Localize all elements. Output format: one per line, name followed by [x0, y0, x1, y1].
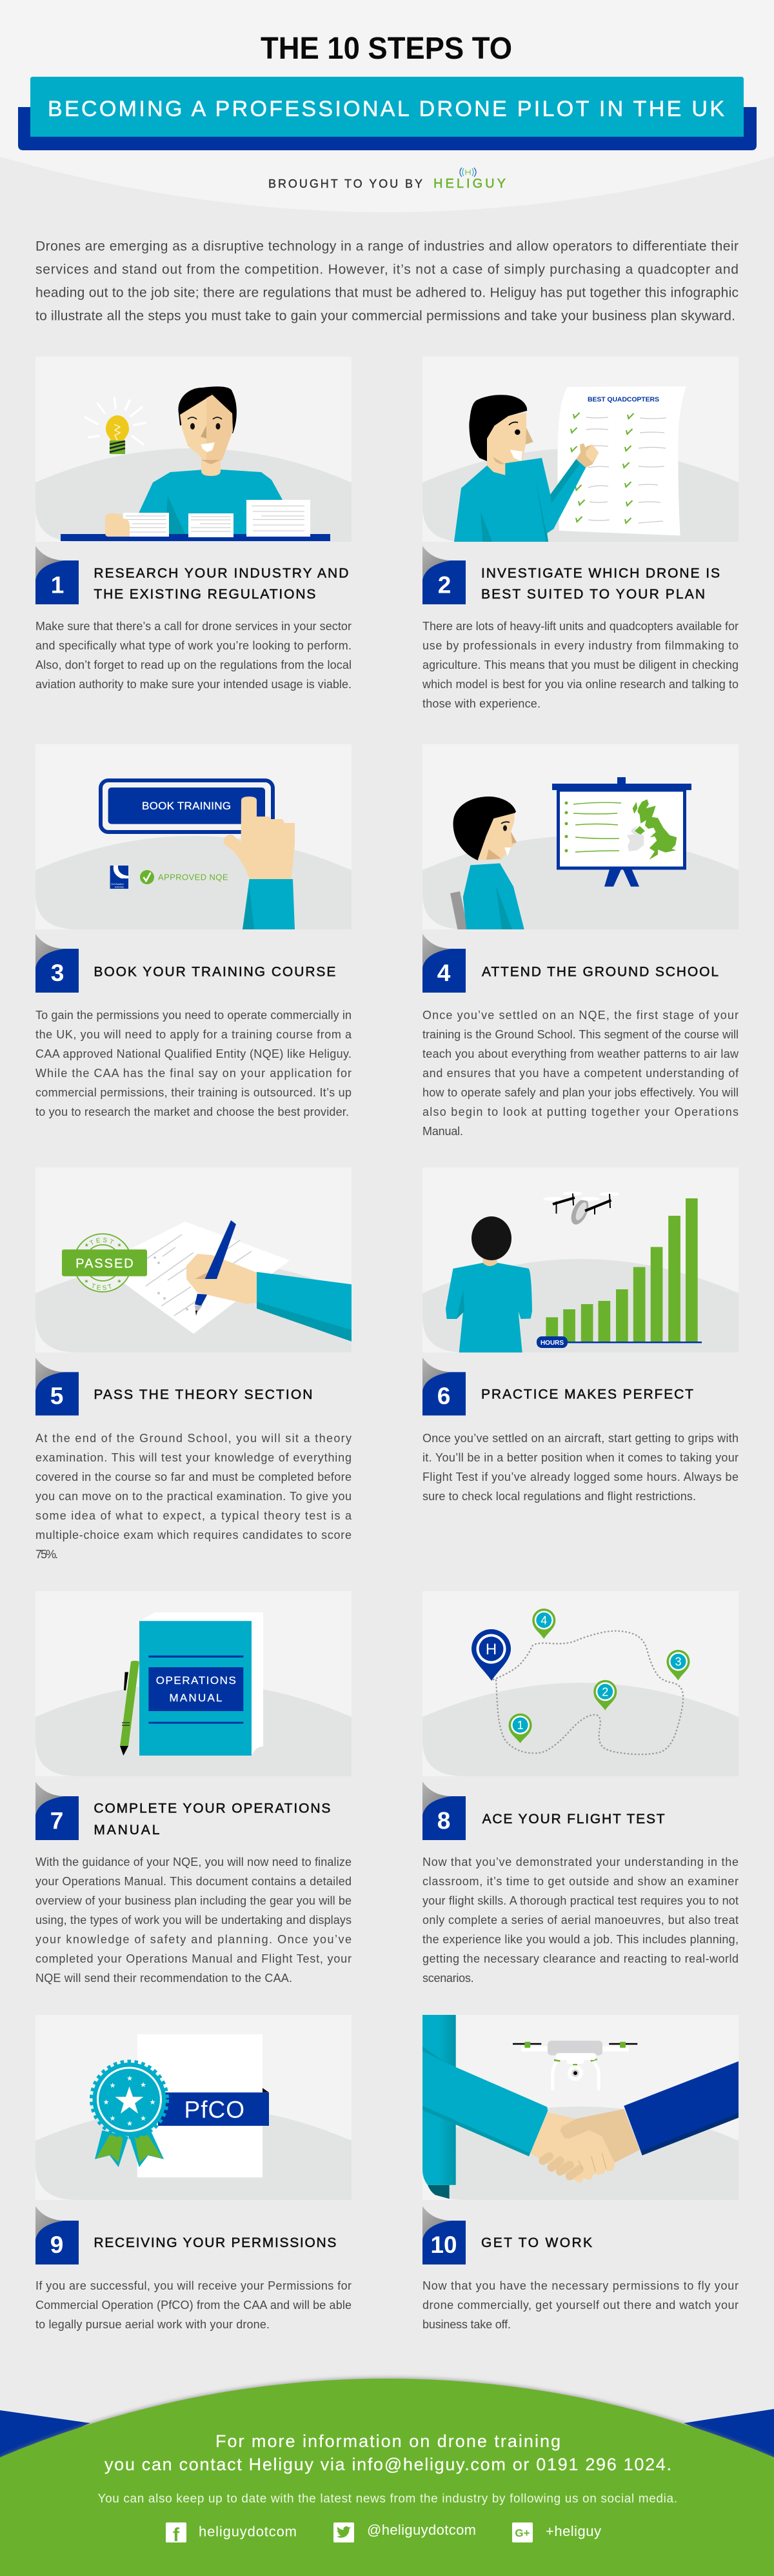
panel: step 5 theory: [35, 1220, 352, 1561]
step 5 body text: At the end of the Ground School, you will sit a theory: [35, 1432, 352, 1445]
step 7 body text: overview of your business plan including the gear you will be: [35, 1894, 352, 1907]
rosette: ★: [140, 2115, 146, 2123]
footer blue ribbons: [0, 2409, 774, 2461]
panel: step 3 book training: [35, 744, 352, 1118]
step 5 body text: multiple-choice exam which requires candidates to score: [35, 1529, 352, 1541]
step 3 heading: BOOK YOUR TRAINING COURSE: [94, 965, 335, 979]
rosette: ★: [110, 2082, 116, 2090]
passed stamp: ★: [84, 1278, 89, 1284]
step 4 heading: ATTEND THE GROUND SCHOOL: [482, 965, 719, 979]
step 4 body text: teach you about everything from weather patterns to air law: [422, 1047, 739, 1060]
chair: [450, 891, 468, 929]
step 1 badge: [35, 546, 79, 604]
passed stamp: ★: [117, 1242, 122, 1248]
dotted route: [493, 1631, 683, 1754]
step 1 body text: and specifically what type of work you’re looking to perform.: [35, 639, 352, 652]
step 6 body text: sure to check local regulations and flight restrictions.: [422, 1490, 696, 1503]
step 5 body text: you can move on to the practical examination. To give you: [35, 1490, 352, 1503]
social: google plus: +heliguy: [546, 2523, 601, 2539]
person: [454, 395, 599, 542]
step 1 body text: [35, 620, 352, 691]
pin: helipad: H: [486, 1641, 497, 1658]
panel: step 4 ground school: [422, 744, 739, 1138]
step 3 body text: To gain the permissions you need to operate commercially in: [35, 1009, 352, 1022]
title banner: BECOMING A PROFESSIONAL DRONE PILOT IN THE UK: [48, 97, 724, 121]
step 6 badge: 6: [437, 1383, 450, 1409]
illustration: handshake with drone: [422, 2015, 739, 2200]
rosette: ★: [140, 2081, 146, 2089]
pin 3: 3: [675, 1655, 682, 1668]
panel: step 9 permissions: [35, 2015, 352, 2331]
pin 4: [532, 1609, 555, 1639]
step 5 badge: 5: [50, 1383, 63, 1409]
book: OPERATIONS: [156, 1674, 236, 1687]
pen: [120, 1661, 139, 1756]
checklist: BEST QUADCOPTERS: [588, 396, 659, 404]
rosette: ★: [126, 2120, 133, 2128]
step 8 body text: scenarios.: [422, 1972, 474, 1985]
passed stamp: PASSED: [75, 1257, 134, 1271]
step 1 badge: 1: [51, 571, 64, 599]
pin 1: [509, 1714, 532, 1743]
step 8 body text: getting the necessary clearance and reacting to real-world: [422, 1952, 739, 1965]
step 9 body text: Commercial Operation (PfCO) from the CAA and will be able: [35, 2299, 352, 2312]
rosette: ★: [103, 2099, 110, 2106]
step 2 heading: INVESTIGATE WHICH DRONE IS: [481, 566, 720, 580]
rosette: ★: [110, 2115, 116, 2123]
panel: step 2 investigate: [422, 357, 739, 710]
step 5 body text: covered in the course so far and must be completed before: [35, 1471, 352, 1483]
social: facebook: f: [173, 2524, 180, 2546]
panel: step 6 practice: [422, 1167, 739, 1503]
rosette: [92, 2061, 168, 2167]
step 7 body text: your knowledge of safety and planning. Once you’ve: [35, 1933, 352, 1946]
pin 2: 2: [602, 1685, 608, 1698]
step 10 body text: business take off.: [422, 2318, 511, 2331]
step 6 badge: [422, 1358, 466, 1416]
intro paragraph: to illustrate all the steps you must take to gain your commercial permissions and take your business plan skyward.: [35, 308, 735, 324]
step 1 heading: THE EXISTING REGULATIONS: [94, 587, 315, 602]
contact text: [104, 2432, 671, 2474]
illustration: hand writing on test with passed stamp: [35, 1220, 352, 1352]
certificate: [137, 2034, 269, 2177]
CAA logo: Civil Aviation: [111, 883, 124, 886]
step 4 body text: Once you’ve settled on an NQE, the first stage of your: [422, 1009, 739, 1022]
social: twitter: [333, 2522, 476, 2542]
step 7 badge: [35, 1781, 79, 1840]
pen lower: [195, 1294, 207, 1316]
step 8 badge: 8: [437, 1807, 450, 1834]
step 3 badge: [35, 934, 79, 993]
drone: [543, 1192, 619, 1227]
step 2 body text: agriculture. This means that you must be diligent in checking: [422, 659, 739, 671]
CAA logo: [110, 866, 128, 889]
step 4 body text: and ensures that you have a competent understanding of: [422, 1067, 739, 1080]
brought to you by Heliguy: BROUGHT TO YOU BY: [268, 177, 422, 190]
contact text: you can contact Heliguy via info@heliguy.com or 0191 296 1024.: [104, 2455, 671, 2474]
step 7 badge: 7: [50, 1807, 63, 1834]
passed stamp: TEST: [92, 1283, 111, 1290]
hand and sleeve: [224, 797, 295, 929]
step 10 badge: [422, 2206, 466, 2264]
step 8 body text: [422, 1856, 739, 1985]
panel: step 1 research: [35, 357, 352, 691]
approved NQE: APPROVED NQE: [158, 873, 228, 882]
intro paragraph: heading out to the job site; there are regulations that must be adhered to. Heliguy has put together this infographic: [35, 285, 739, 301]
person from behind: [446, 1216, 532, 1352]
panel: step 7 operations manual: [35, 1591, 352, 1985]
person: [129, 386, 283, 534]
step 3 body text: to you to research the market and choose the best provider.: [35, 1105, 349, 1118]
pin 3: [667, 1650, 690, 1680]
social: facebook: heliguydotcom: [199, 2524, 297, 2540]
step 5 body text: examination. This will test your knowledge of everything: [35, 1451, 352, 1464]
step 7 body text: your Operations Manual. This document contains a detailed: [35, 1875, 352, 1888]
passed stamp: ★: [117, 1278, 122, 1284]
approved NQE: [140, 870, 228, 884]
step 9 body text: to legally pursue aerial work with your drone.: [35, 2318, 270, 2331]
panel: step 8 flight test: [422, 1591, 739, 1985]
step 6 heading: PRACTICE MAKES PERFECT: [481, 1387, 693, 1402]
CAA logo: Authority: [115, 886, 124, 889]
step 8 badge: [422, 1781, 466, 1840]
step 5 body text: [35, 1432, 352, 1561]
step 3 badge: 3: [51, 960, 64, 986]
step 9 heading: RECEIVING YOUR PERMISSIONS: [94, 2235, 336, 2250]
step 5 body text: 75%.: [35, 1548, 58, 1561]
step 10 badge: 10: [431, 2232, 457, 2258]
hand and sleeve: [186, 1254, 352, 1342]
step 3 body text: [35, 1009, 352, 1118]
test paper: [99, 1222, 290, 1334]
illustration: finger pressing book training button: [35, 744, 352, 929]
passed stamp: ★: [84, 1242, 89, 1248]
step 9 body text: [35, 2279, 352, 2331]
panel: step 10 get to work: [422, 2015, 739, 2331]
step 8 body text: your flight skills. A thorough practical test requires you to not: [422, 1894, 739, 1907]
pole: [422, 2015, 456, 2199]
step 8 heading: ACE YOUR FLIGHT TEST: [482, 1812, 665, 1827]
step 5 heading: PASS THE THEORY SECTION: [94, 1387, 312, 1402]
step 5 badge: [35, 1358, 79, 1416]
intro paragraph: Drones are emerging as a disruptive technology in a range of industries and allow operators to differentiate their: [35, 239, 739, 254]
icon: light bulb: [85, 398, 145, 454]
step 1 body text: Also, don’t forget to read up on the regulations from the local: [35, 659, 352, 671]
bar chart of hours: [537, 1198, 702, 1348]
illustration: PfCO certificate and rosette: [35, 2015, 352, 2200]
social media text: You can also keep up to date with the latest news from the industry by following us on social media.: [98, 2492, 677, 2506]
step 2 body text: those with experience.: [422, 697, 541, 710]
step 7 body text: completed your Operations Manual and Flight Test, your: [35, 1952, 352, 1965]
step 4 badge: [422, 934, 466, 993]
brought to you by Heliguy: HELIGUY: [433, 177, 506, 191]
passed stamp: [62, 1233, 147, 1293]
step 2 heading: BEST SUITED TO YOUR PLAN: [481, 587, 705, 602]
step 3 body text: While the CAA has the final say on your application for: [35, 1067, 352, 1080]
step 7 heading: MANUAL: [94, 1823, 159, 1838]
step 9 badge: 9: [50, 2232, 63, 2258]
contact text: For more information on drone training: [215, 2432, 561, 2451]
step 2 badge: 2: [438, 571, 451, 599]
step 7 heading: [94, 1801, 330, 1838]
certificate: PfCO: [184, 2096, 244, 2123]
step 9 body text: If you are successful, you will receive your Permissions for: [35, 2279, 352, 2292]
step 8 body text: Now that you’ve demonstrated your understanding in the: [422, 1856, 739, 1868]
step 7 heading: COMPLETE YOUR OPERATIONS: [94, 1801, 330, 1816]
drone: [513, 2041, 637, 2090]
step 10 body text: [422, 2279, 739, 2331]
step 7 body text: using, the types of work you will be undertaking and displays: [35, 1914, 352, 1927]
step 10 body text: drone commercially, get yourself out there and watch your: [422, 2299, 739, 2312]
footer green dome: [0, 2377, 774, 2576]
social: facebook: [166, 2522, 297, 2546]
footer: [0, 2377, 774, 2576]
step 4 badge: 4: [437, 960, 451, 986]
title banner: [18, 77, 757, 150]
illustration: person watching presentation of UK map: [422, 744, 739, 929]
step 7 body text: NQE will send their recommendation to the CAA.: [35, 1972, 292, 1985]
step 2 badge: [422, 546, 466, 604]
UK map: [627, 799, 677, 860]
step 7 body text: With the guidance of your NQE, you will now need to finalize: [35, 1856, 352, 1868]
step 3 body text: commercial permissions, their training is outsourced. It’s up: [35, 1086, 352, 1099]
step 1 heading: [94, 566, 348, 602]
book: [139, 1612, 263, 1756]
pin 2: [593, 1680, 617, 1710]
illustration: operations manual book and pen: [35, 1591, 352, 1776]
intro paragraph: [35, 239, 739, 324]
step 6 body text: Once you’ve settled on an aircraft, start getting to grips with: [422, 1432, 739, 1445]
brought to you by Heliguy: [268, 168, 506, 191]
step 1 heading: RESEARCH YOUR INDUSTRY AND: [94, 566, 348, 580]
table and paper stacks: [61, 500, 330, 541]
step 6 body text: [422, 1432, 739, 1503]
step 4 body text: Manual.: [422, 1125, 463, 1138]
step 8 body text: only complete a series of aerial manoeuvres, but also treat: [422, 1914, 739, 1927]
step 4 body text: how to operate safely and plan your jobs effectively. You will: [422, 1086, 739, 1099]
bar chart of hours: HOURS: [541, 1340, 564, 1347]
title: THE 10 STEPS TO: [261, 32, 512, 66]
pin 1: 1: [517, 1719, 524, 1732]
intro paragraph: services and stand out from the competition. However, it’s not a case of simply purchasing a quadcopter and: [35, 262, 739, 277]
pin 4: 4: [541, 1614, 547, 1627]
social: google plus: [512, 2522, 601, 2542]
book training button: BOOK TRAINING: [142, 800, 231, 812]
step 2 body text: use by professionals in every industry from filmmaking to: [422, 639, 739, 652]
step 6 body text: Flight Test if you’ve already logged some hours. Always be: [422, 1471, 739, 1483]
step 8 body text: the experience like you would a job. This includes planning,: [422, 1933, 739, 1946]
step 3 body text: CAA approved National Qualified Entity (NQE) like Heliguy.: [35, 1047, 352, 1060]
social: twitter: @heliguydotcom: [367, 2522, 476, 2538]
step 2 body text: There are lots of heavy-lift units and quadcopters available for: [422, 620, 739, 633]
checklist: [557, 386, 686, 535]
illustration: pilot, drone and hours chart: [422, 1167, 739, 1352]
rosette: ★: [150, 2099, 156, 2106]
passed stamp: TEST: [89, 1238, 114, 1245]
step 1 body text: aviation authority to make sure your intended usage is viable.: [35, 678, 352, 691]
step 2 body text: [422, 620, 739, 710]
illustration: flight route with map pins: [422, 1591, 739, 1776]
illustration: man with papers and light bulb: [35, 357, 352, 542]
book: MANUAL: [169, 1692, 222, 1704]
pin: helipad: [471, 1629, 511, 1681]
social: google plus: G+: [515, 2527, 530, 2539]
step 4 body text: [422, 1009, 739, 1138]
presentation board: [552, 777, 691, 887]
rosette: ★: [126, 2075, 133, 2083]
step 2 body text: which model is best for you via online research and talking to: [422, 678, 739, 691]
step 7 body text: [35, 1856, 352, 1985]
person: [453, 797, 524, 929]
step 3 body text: the UK, you will need to apply for a training course from a: [35, 1028, 352, 1041]
step 2 heading: [481, 566, 720, 602]
handshake: [422, 2046, 739, 2183]
illustration: person checking list of quadcopters: [422, 357, 739, 542]
icon: heliguy logo: [460, 168, 476, 177]
step 4 body text: training is the Ground School. This segment of the course will: [422, 1028, 739, 1041]
step 1 body text: Make sure that there’s a call for drone services in your sector: [35, 620, 352, 633]
pen upper: [205, 1220, 236, 1279]
step 8 body text: classroom, it’s time to get outside and show an examiner: [422, 1875, 739, 1888]
book training button: [101, 780, 273, 832]
step 10 heading: GET TO WORK: [481, 2235, 592, 2250]
step 10 body text: Now that you have the necessary permissions to fly your: [422, 2279, 739, 2292]
step 4 body text: also begin to look at putting together your Operations: [422, 1105, 739, 1118]
step 5 body text: some idea of what to expect, a typical theory test is a: [35, 1509, 352, 1522]
step 9 badge: [35, 2206, 79, 2264]
step 6 body text: it. You’ll be in a better position when it comes to taking your: [422, 1451, 739, 1464]
